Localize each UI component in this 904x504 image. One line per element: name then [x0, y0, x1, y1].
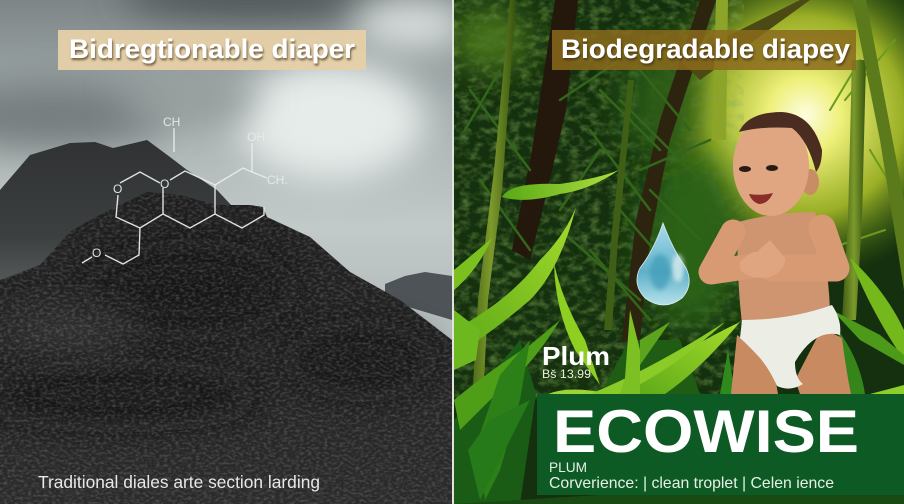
- chemical structure diagram: [82, 115, 288, 264]
- brand panel: ECOWISE: [537, 394, 904, 495]
- sky: [0, 0, 452, 340]
- legs: [731, 328, 851, 394]
- divider: [452, 0, 454, 504]
- chemical labels: O: [160, 177, 169, 191]
- bamboo leaves: [454, 170, 904, 504]
- bamboo stalks: [473, 0, 904, 384]
- hair: [739, 112, 822, 172]
- forest background: [454, 0, 904, 504]
- right arm: [816, 214, 850, 282]
- chemical labels: [92, 115, 288, 260]
- brand tag: Plum price: [543, 346, 608, 378]
- water droplet icon: [637, 223, 689, 305]
- soil shading: [0, 250, 430, 420]
- heading label: left: [58, 30, 366, 70]
- ear: [804, 169, 819, 195]
- heading label: right: [552, 30, 856, 70]
- heading label: right: Biodegradable diapey: [561, 34, 850, 64]
- diaper: [740, 305, 840, 389]
- brand panel: ECOWISE: ECOWISE: [553, 398, 859, 465]
- hands: [740, 240, 785, 278]
- eyes: [739, 166, 751, 172]
- panel: traditional diaper landfill: [0, 0, 470, 504]
- brand tag: Plum price: Bš 13.99: [542, 367, 591, 381]
- heading label: left: Bidregtionable diaper: [69, 34, 356, 64]
- chemical labels: O: [92, 246, 101, 260]
- brand tag: Plum price: Plum: [542, 341, 610, 371]
- brand panel: ECOWISE: PLUM: [549, 459, 587, 475]
- rear mountain: [0, 140, 231, 280]
- brand panel: ECOWISE: Corverience: | clean troplet | Celen ience: [549, 475, 834, 492]
- smile: [749, 193, 773, 204]
- torso: [738, 212, 830, 324]
- chemical labels: CH: [163, 115, 180, 129]
- thin bamboo leaves: [465, 20, 900, 320]
- dark trunks: [512, 0, 810, 340]
- panel: biodegradable diaper bamboo forest: [450, 0, 904, 504]
- head: [733, 128, 809, 216]
- chemical labels: CH.: [267, 173, 288, 187]
- soil texture: [0, 192, 452, 504]
- storm clouds: [0, 0, 470, 180]
- baby with diaper: [711, 112, 851, 394]
- chemical labels: OH: [247, 130, 265, 144]
- landfill mound: [0, 192, 452, 504]
- distant hill: [385, 272, 452, 320]
- left arm: [711, 232, 752, 272]
- midground foliage: [450, 10, 740, 330]
- chemical labels: O: [113, 182, 122, 196]
- foliage texture: [454, 0, 744, 400]
- sunlight glow: [666, 0, 904, 262]
- caption: landfill: Traditional diales arte section larding: [38, 472, 320, 492]
